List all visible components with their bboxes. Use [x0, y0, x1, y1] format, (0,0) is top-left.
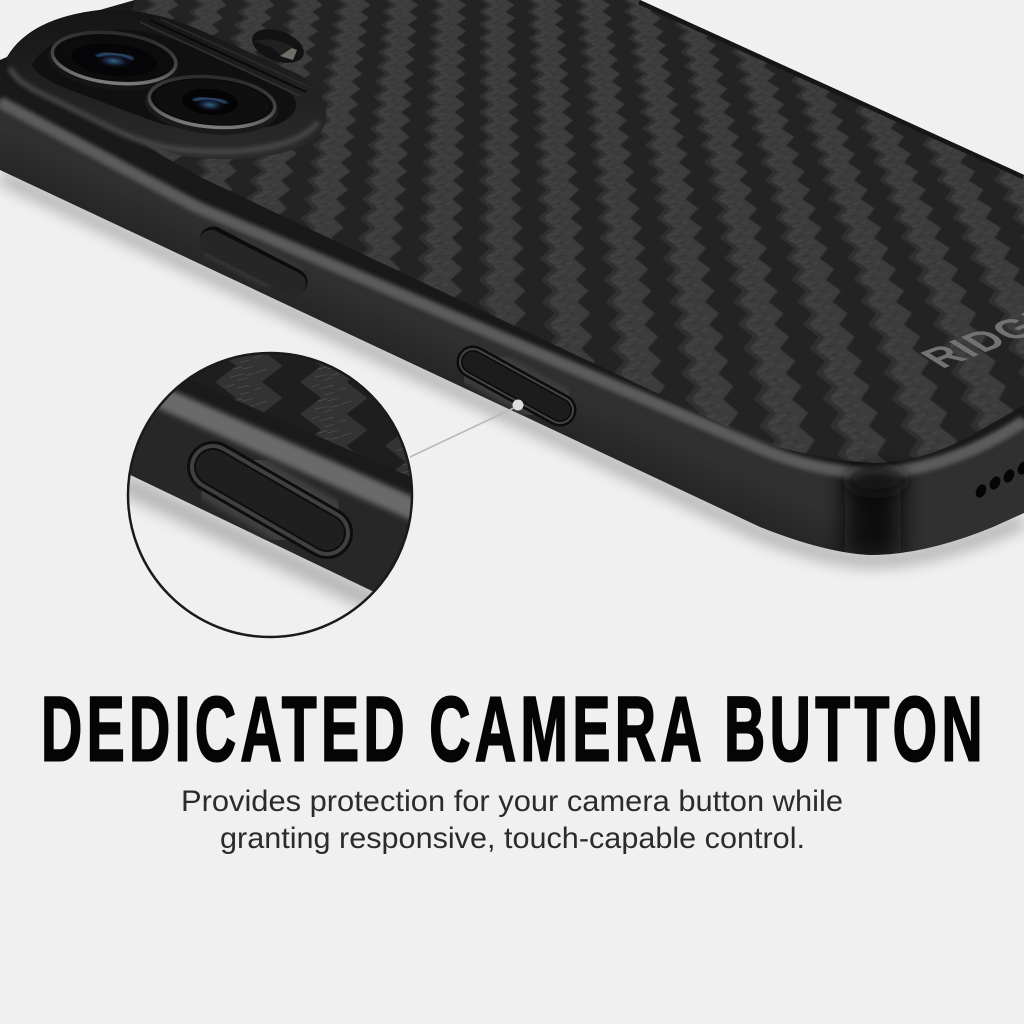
volume button: [211, 240, 294, 284]
camera control button: [473, 362, 560, 410]
description line two: granting responsive, touch-capable control.: [220, 822, 805, 855]
leader dot: [512, 400, 524, 410]
top edge rim: [640, 0, 1024, 175]
lens one: [50, 30, 178, 86]
leader line: [410, 406, 518, 457]
inset carbon panel: [216, 354, 410, 476]
inset border: [128, 353, 412, 637]
magnified button inset: [120, 345, 420, 645]
rim highlight: [0, 102, 1024, 474]
inset background: [120, 345, 420, 645]
camera bump: [7, 10, 326, 159]
corner rim shading: [846, 466, 906, 494]
phone hardware details: [0, 0, 1024, 499]
inset shadow: [120, 482, 380, 604]
inset case side: [130, 393, 411, 592]
inset dark frame: [176, 380, 410, 494]
carbon fibre back panel: [108, 0, 1024, 463]
inset rim highlight: [140, 388, 420, 512]
lens two: [145, 74, 278, 134]
inset button: [213, 467, 327, 533]
description: [181, 785, 843, 855]
phone body base layer: [0, 0, 1024, 576]
description line one: Provides protection for your camera button while: [181, 785, 843, 818]
speaker holes: [976, 462, 1024, 498]
flash opening: [252, 29, 304, 63]
phone silhouette: [0, 0, 1024, 600]
phone shadow: [0, 176, 1024, 560]
